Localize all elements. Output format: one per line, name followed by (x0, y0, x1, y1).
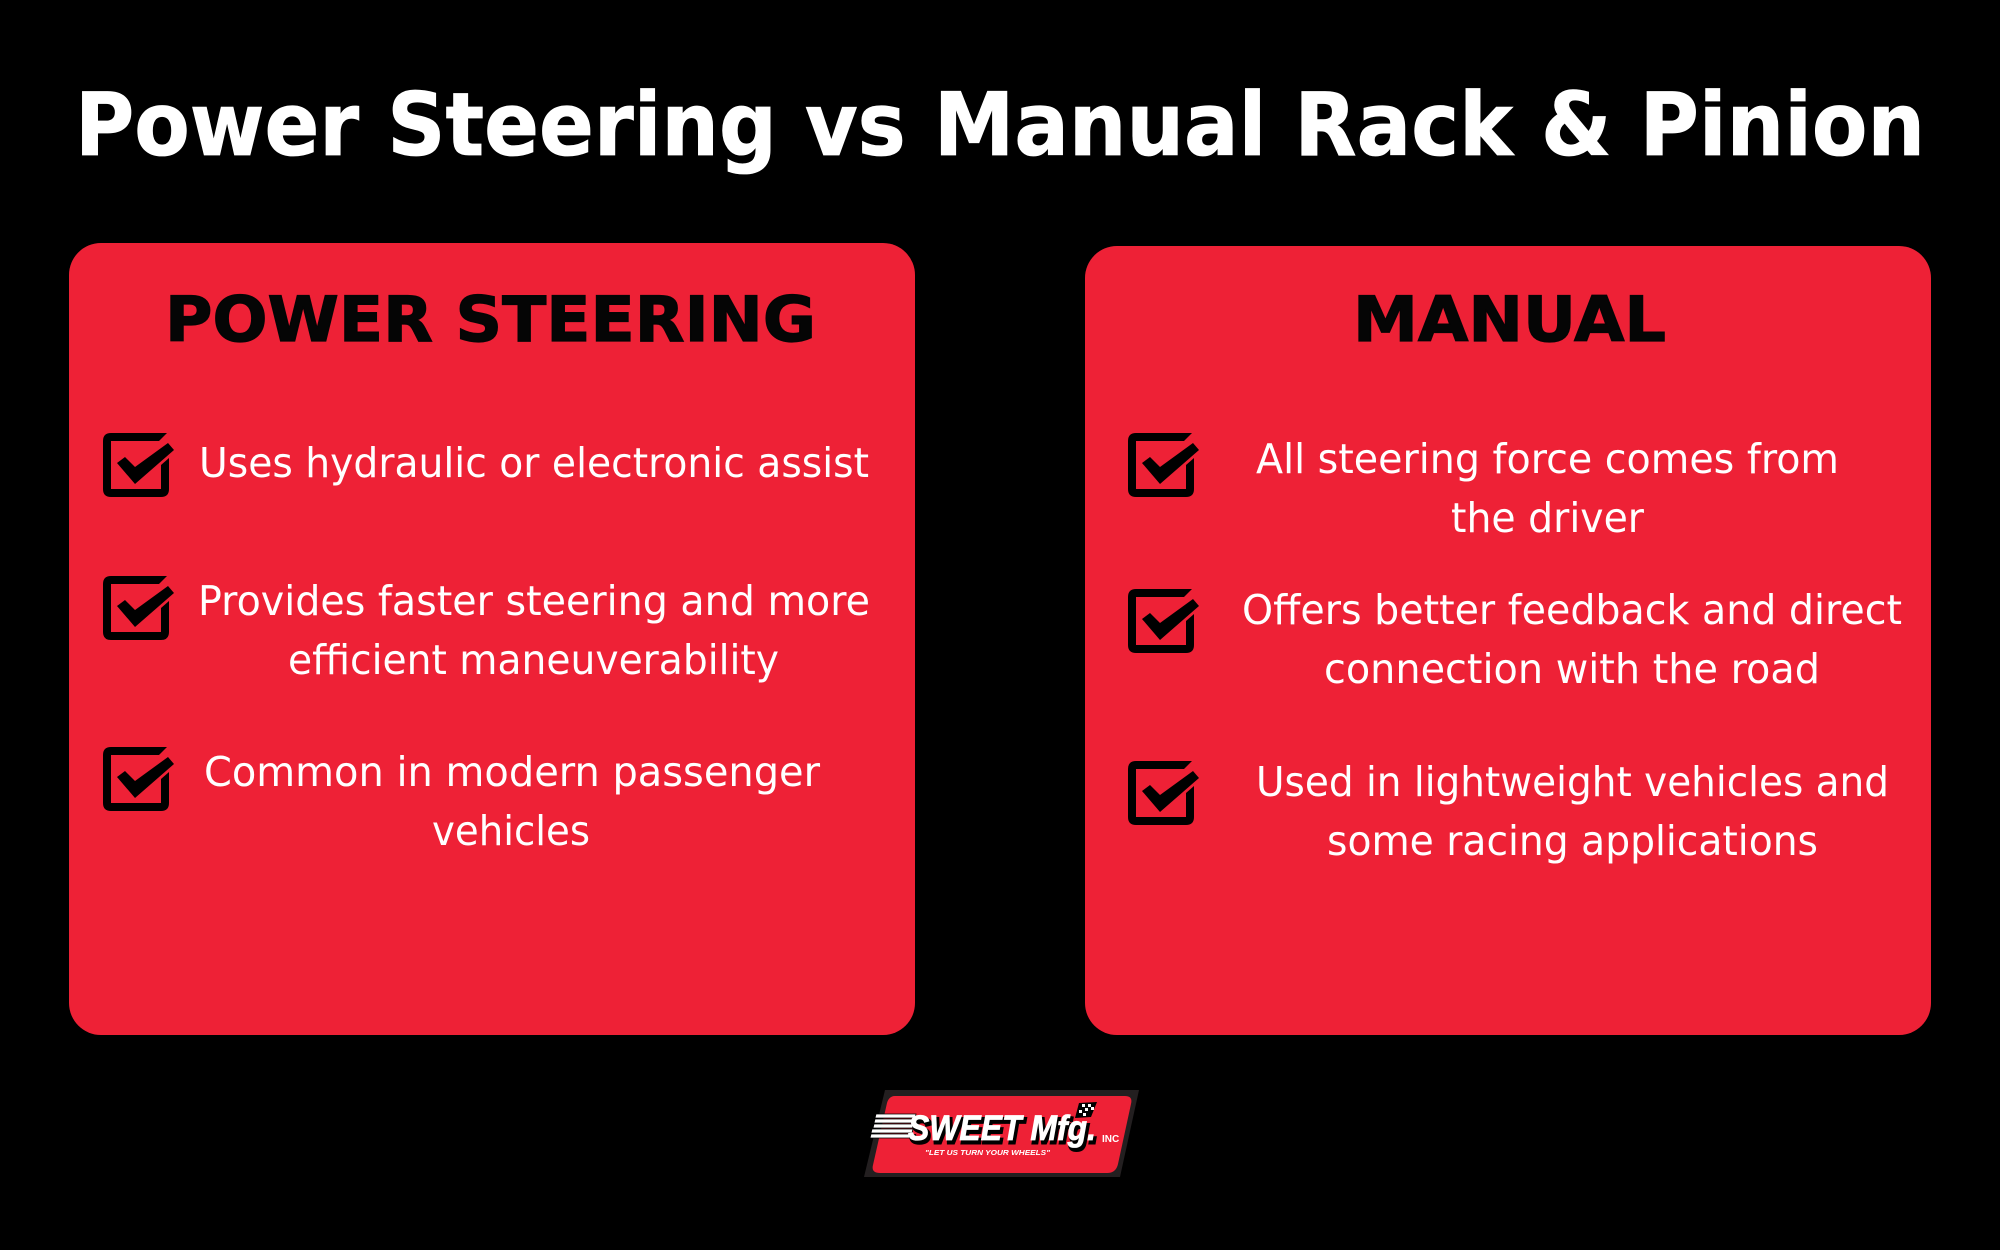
text: better feedback: Offers better feedback and direct (1242, 586, 1902, 634)
logo flag (1075, 1102, 1097, 1118)
text: better feedback (1242, 586, 1902, 693)
text: lightweight vehicles: some racing applications (1327, 817, 1818, 865)
icon: checkbox 2 (103, 576, 174, 640)
text: faster steering (198, 577, 870, 684)
logo INC: INC (1102, 1134, 1119, 1145)
icon: checkbox 3 (1128, 761, 1199, 825)
text: passenger vehicles (204, 748, 820, 855)
icon: checkbox 2 (1128, 589, 1199, 653)
heading: manual: MANUAL (1353, 283, 1666, 356)
heading: power steering: POWER STEERING (165, 283, 816, 356)
text: better feedback: connection with the road (1324, 645, 1820, 693)
text: steering force: All steering force comes from (1256, 435, 1839, 483)
text: faster steering: Provides faster steering and more (198, 577, 870, 625)
panel: power steering (69, 243, 915, 1035)
logo wordmark shadow: SWEET Mfg. (910, 1112, 1098, 1151)
panel: manual (1085, 246, 1931, 1035)
text: passenger vehicles: Common in modern passenger (204, 748, 820, 796)
text: faster steering: efficient maneuverability (288, 636, 779, 684)
text: passenger vehicles: vehicles (432, 807, 590, 855)
logo stripes (870, 1114, 916, 1138)
text: lightweight vehicles (1256, 758, 1889, 865)
icon: checkbox 3 (103, 747, 174, 811)
text: lightweight vehicles: Used in lightweight vehicles and (1256, 758, 1889, 806)
text: steering force: the driver (1451, 494, 1644, 542)
icon: checkbox 1 (103, 433, 174, 497)
logo: Sweet Mfg (864, 1090, 1139, 1177)
text: hydraulic assist: Uses hydraulic or electronic assist (199, 439, 869, 487)
icon: checkbox 1 (1128, 433, 1199, 497)
logo tagline: "LET US TURN YOUR WHEELS" (925, 1148, 1050, 1157)
text: steering force (1256, 435, 1839, 542)
logo wordmark: SWEET Mfg. (908, 1109, 1096, 1148)
